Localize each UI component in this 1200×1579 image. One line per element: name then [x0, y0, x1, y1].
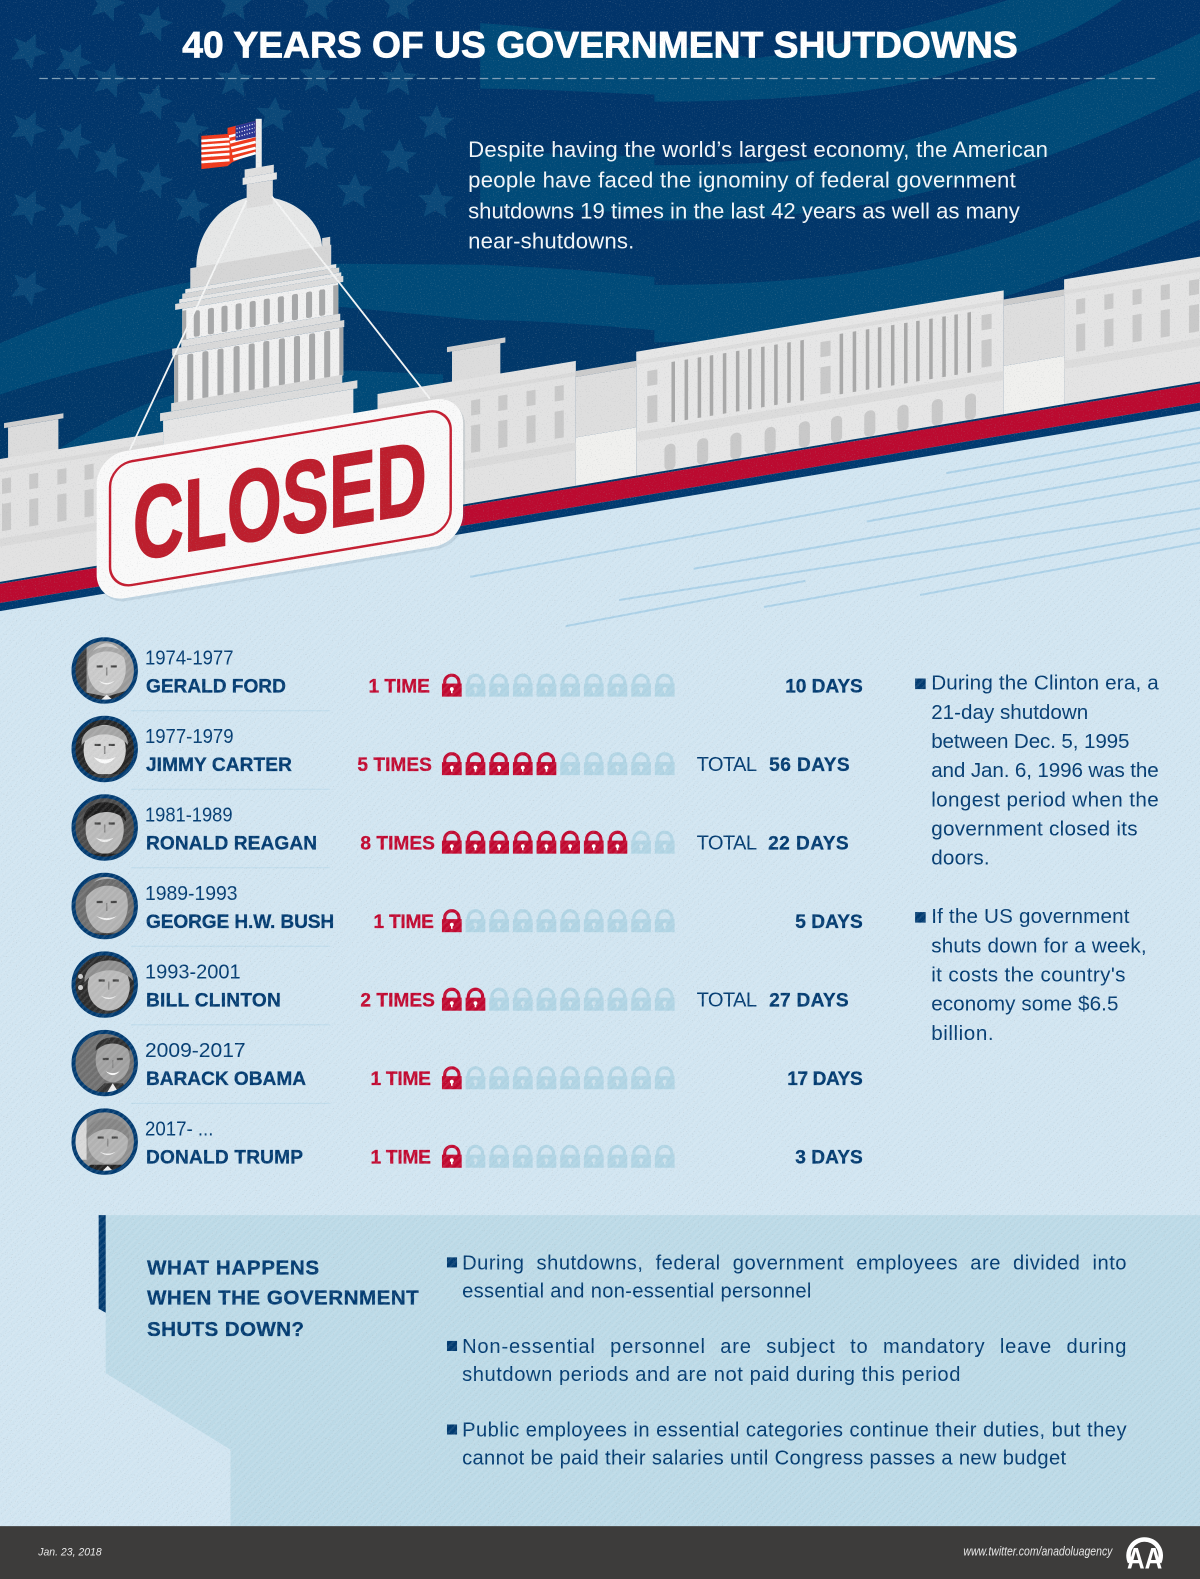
- portrait: Trump: [71, 1108, 138, 1175]
- rotunda colonnades: [160, 280, 357, 555]
- bullet 3: Public employees in essential categories continue their duties, but they: [462, 1420, 1127, 1442]
- illustration: Capitol building: [0, 9, 1200, 612]
- table row: Barack Obama: 17 DAYS: [787, 1069, 863, 1090]
- right wing two: [1004, 256, 1200, 414]
- table row: Bill Clinton: TOTAL: [697, 990, 757, 1012]
- locks: 5 of 10: [442, 754, 675, 775]
- table row: Bill Clinton: 1993-2001: [145, 962, 241, 984]
- note 1: [915, 672, 1159, 870]
- logo: AA: AA: [1127, 1543, 1162, 1575]
- locks: 1 of 10: [442, 1068, 675, 1089]
- table row: Donald Trump: 3 DAYS: [795, 1148, 863, 1169]
- table row: George H.W. Bush: GEORGE H.W. BUSH: [146, 912, 334, 933]
- decorative blue streaks: [470, 428, 1200, 626]
- dome: [196, 196, 322, 287]
- table row: Ronald Reagan: 8 TIMES: [360, 834, 435, 855]
- table row: Bill Clinton: 2 TIMES: [360, 991, 435, 1012]
- table row: Barack Obama: BARACK OBAMA: [146, 1069, 306, 1090]
- bullet 3: [447, 1420, 1127, 1470]
- bullet 1: During shutdowns, federal government employees are divided into: [462, 1252, 1127, 1274]
- sign: CLOSED: [97, 394, 465, 606]
- title: 40 YEARS OF US GOVERNMENT SHUTDOWNS: [182, 23, 1018, 65]
- note 1: longest period when the: [931, 788, 1159, 811]
- source link: www.twitter.com/anadoluagency: [963, 1544, 1113, 1558]
- bullet 2: Non-essential personnel are subject to mandatory leave during: [462, 1336, 1127, 1358]
- panel heading: [147, 1256, 419, 1341]
- navy ground stripe: [0, 401, 1200, 612]
- cupola: [243, 164, 277, 209]
- table row: Gerald Ford: GERALD FORD: [146, 677, 286, 698]
- table row: George H.W. Bush: 1 TIME: [373, 912, 434, 933]
- table row: Jimmy Carter: 1977-1979: [145, 726, 234, 748]
- table row: Donald Trump: DONALD TRUMP: [146, 1148, 303, 1169]
- table row: Ronald Reagan: [71, 794, 849, 868]
- locks: 8 of 10: [442, 832, 675, 854]
- texture overlay: [0, 413, 1200, 1526]
- bullet 2: [447, 1336, 1127, 1386]
- table row: George H.W. Bush: 5 DAYS: [795, 912, 863, 933]
- table row: Ronald Reagan: RONALD REAGAN: [146, 834, 317, 855]
- portrait: Ford: [71, 637, 138, 704]
- table row: Ronald Reagan: 1981-1989: [145, 804, 233, 826]
- table row: Jimmy Carter: 5 TIMES: [357, 755, 432, 776]
- table row: Donald Trump: 2017- ...: [145, 1119, 213, 1141]
- table row: Jimmy Carter: JIMMY CARTER: [146, 755, 292, 776]
- bullet 3: cannot be paid their salaries until Congress passes a new budget: [462, 1448, 1067, 1470]
- table row: Bill Clinton: BILL CLINTON: [146, 991, 281, 1012]
- table row: Bill Clinton: 27 DAYS: [769, 991, 849, 1012]
- intro text: shutdowns 19 times in the last 42 years as well as many: [468, 198, 1021, 223]
- side notes: [915, 672, 1159, 1045]
- table row: Jimmy Carter: 56 DAYS: [769, 755, 850, 776]
- note 2: billion.: [931, 1022, 994, 1045]
- locks: 1 of 10: [442, 911, 675, 932]
- locks: 1 of 10: [442, 675, 675, 697]
- table row: Barack Obama: 2009-2017: [145, 1040, 246, 1062]
- table row: Gerald Ford: 1 TIME: [368, 677, 430, 698]
- table row: Donald Trump: 1 TIME: [370, 1148, 431, 1169]
- panel: what happens: [99, 1215, 1200, 1526]
- table row: Donald Trump: [71, 1108, 863, 1175]
- table row: Barack Obama: 1 TIME: [370, 1069, 431, 1090]
- table row: Jimmy Carter: TOTAL: [697, 754, 757, 776]
- table row: Bill Clinton: [71, 951, 849, 1025]
- red ground stripe: [0, 382, 1200, 604]
- portrait: Obama: [71, 1030, 138, 1096]
- bullet 2: shutdown periods and are not paid during this period: [462, 1364, 960, 1386]
- table row: Gerald Ford: 1974-1977: [145, 647, 234, 669]
- date: Jan. 23, 2018: [37, 1546, 102, 1558]
- central portico wing: [636, 290, 1004, 476]
- dome attic: [175, 235, 343, 310]
- table row: George H.W. Bush: 1989-1993: [145, 883, 238, 905]
- panel heading: WHAT HAPPENS: [147, 1256, 319, 1279]
- table row: Ronald Reagan: TOTAL: [697, 833, 757, 855]
- locks: 2 of 10: [442, 989, 675, 1011]
- table row: Gerald Ford: 10 DAYS: [785, 677, 863, 698]
- panel heading: WHEN THE GOVERNMENT: [147, 1287, 419, 1310]
- intro text: people have faced the ignominy of federal government: [468, 168, 1016, 193]
- note 2: shuts down for a week,: [931, 934, 1147, 957]
- bullet 1: essential and non-essential personnel: [462, 1281, 811, 1303]
- note 1: government closed its: [931, 818, 1138, 841]
- note 2: If the US government: [931, 905, 1130, 928]
- note 2: economy some $6.5: [931, 993, 1118, 1016]
- table row: Ronald Reagan: 22 DAYS: [768, 834, 849, 855]
- left wing: [0, 397, 163, 582]
- footer bar: [0, 1526, 1200, 1579]
- intro text: near-shutdowns.: [468, 229, 634, 254]
- locks: 1 of 10: [442, 1146, 675, 1168]
- table row: Gerald Ford: [71, 637, 863, 711]
- accent bar: [99, 1215, 106, 1313]
- panel heading: SHUTS DOWN?: [147, 1318, 304, 1341]
- hero sky background: [0, 0, 1200, 584]
- table row: George H.W. Bush: [71, 873, 863, 946]
- note 1: and Jan. 6, 1996 was the: [931, 759, 1159, 782]
- note 2: it costs the country's: [931, 964, 1126, 987]
- table row: Jimmy Carter: [71, 716, 850, 789]
- right wing one: [378, 316, 636, 519]
- sign: CLOSED: CLOSED: [133, 418, 427, 583]
- portrait: Bush: [71, 873, 138, 939]
- table row: Barack Obama: [71, 1030, 863, 1103]
- intro text: [468, 137, 1048, 254]
- portrait: Reagan: [71, 794, 138, 861]
- icon: American flag on pole: [201, 119, 262, 169]
- ropes holding the sign: [130, 196, 430, 450]
- note 1: During the Clinton era, a: [931, 672, 1159, 695]
- note 1: between Dec. 5, 1995: [931, 730, 1130, 753]
- bullet 1: [447, 1252, 1127, 1303]
- intro text: Despite having the world’s largest economy, the American: [468, 137, 1048, 162]
- portrait: Clinton: [71, 951, 138, 1018]
- portrait: Carter: [71, 716, 138, 782]
- note 1: 21-day shutdown: [931, 701, 1088, 724]
- note 1: doors.: [931, 847, 990, 870]
- note 2: [915, 905, 1147, 1045]
